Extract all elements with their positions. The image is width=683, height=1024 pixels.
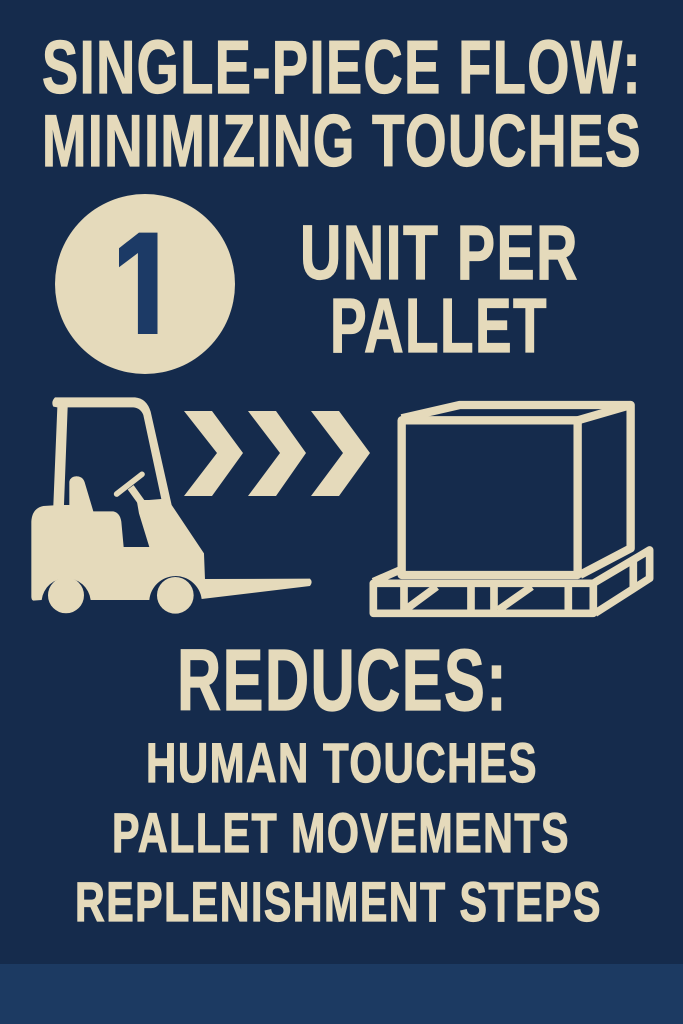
box outline <box>402 405 631 575</box>
unit per pallet label <box>300 210 579 369</box>
reduces list <box>75 731 602 933</box>
number badge: 1 <box>104 195 185 391</box>
title <box>42 25 642 182</box>
unit per pallet label: PALLET <box>330 283 548 369</box>
number badge <box>55 194 235 391</box>
icon: chevron arrows <box>184 411 370 496</box>
unit per pallet label: UNIT PER <box>300 210 579 296</box>
footer band <box>0 964 683 1024</box>
steering wheel <box>117 474 142 494</box>
reduces heading: REDUCES: <box>177 632 508 729</box>
icon: forklift wheels <box>48 577 194 614</box>
pallet <box>373 550 650 613</box>
icon: box on pallet <box>373 405 650 613</box>
icon: forklift <box>31 397 312 614</box>
reduces list: HUMAN TOUCHES <box>146 731 538 794</box>
